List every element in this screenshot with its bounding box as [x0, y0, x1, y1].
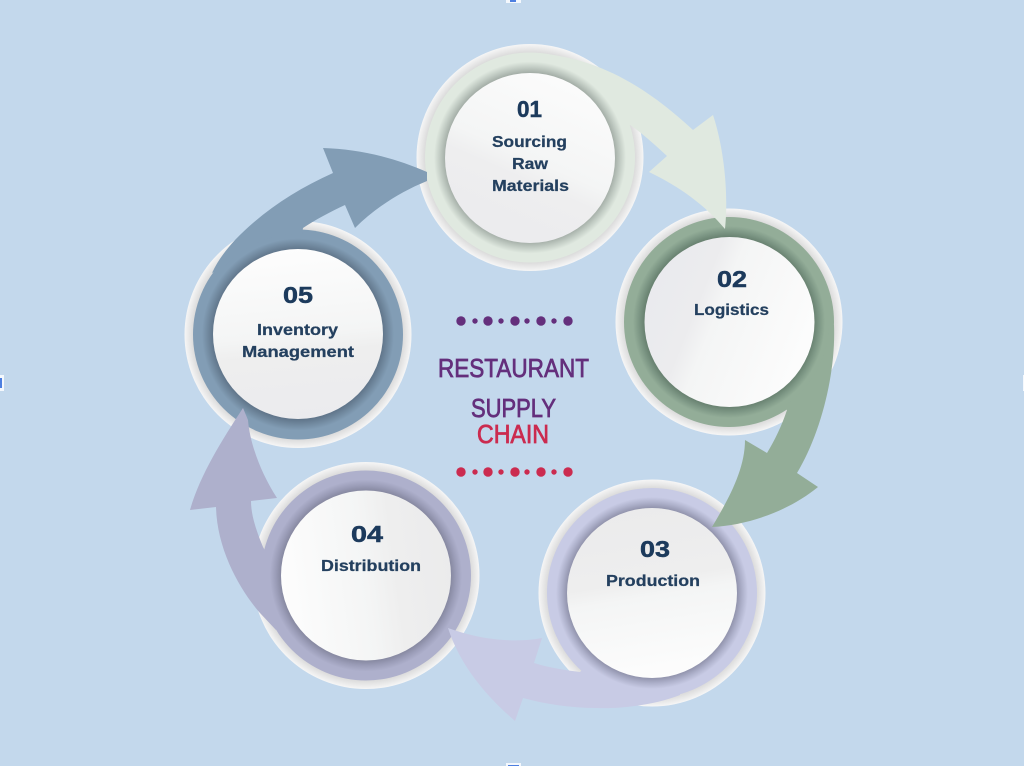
arrow: 01 to 02 [535, 53, 726, 229]
label: Sourcing Raw Materials: Sourcing [492, 134, 567, 151]
arrow: 02 to 03 [712, 325, 834, 527]
step 03: Production [538, 480, 766, 706]
bottom dotted divider [456, 467, 573, 477]
label: Inventory Management: Management [242, 344, 355, 361]
step 02: Logistics [616, 208, 842, 436]
label: Inventory Management: Inventory [257, 322, 338, 339]
number 05: 05 [283, 282, 313, 308]
step 05: Inventory Management [184, 221, 412, 448]
label: Production: Production [606, 573, 700, 590]
label: Logistics: Logistics [694, 302, 769, 319]
label: Inventory Management [242, 322, 355, 361]
label: Distribution: Distribution [321, 558, 421, 575]
number 02: 02 [717, 266, 747, 292]
number 03: 03 [640, 536, 670, 562]
label: Sourcing Raw Materials: Raw [512, 156, 549, 173]
step 04: Distribution [252, 462, 480, 689]
number 01: 01 [517, 96, 542, 122]
title: Restaurant Supply Chain: SUPPLY [471, 393, 556, 423]
arrow: 03 to 04 [448, 628, 680, 721]
arrow: 04 to 05 [190, 408, 277, 630]
label: Sourcing Raw Materials: Materials [492, 178, 569, 195]
title: Restaurant Supply Chain: RESTAURANT [438, 353, 589, 383]
number 04: 04 [351, 521, 383, 547]
step 01: Sourcing Raw Materials [416, 44, 644, 271]
title: Restaurant Supply Chain [438, 353, 589, 449]
label: Sourcing Raw Materials [492, 134, 569, 195]
title: Restaurant Supply Chain: CHAIN [477, 419, 549, 449]
top dotted divider [456, 316, 573, 326]
arrow: 05 to 01 [212, 148, 427, 273]
